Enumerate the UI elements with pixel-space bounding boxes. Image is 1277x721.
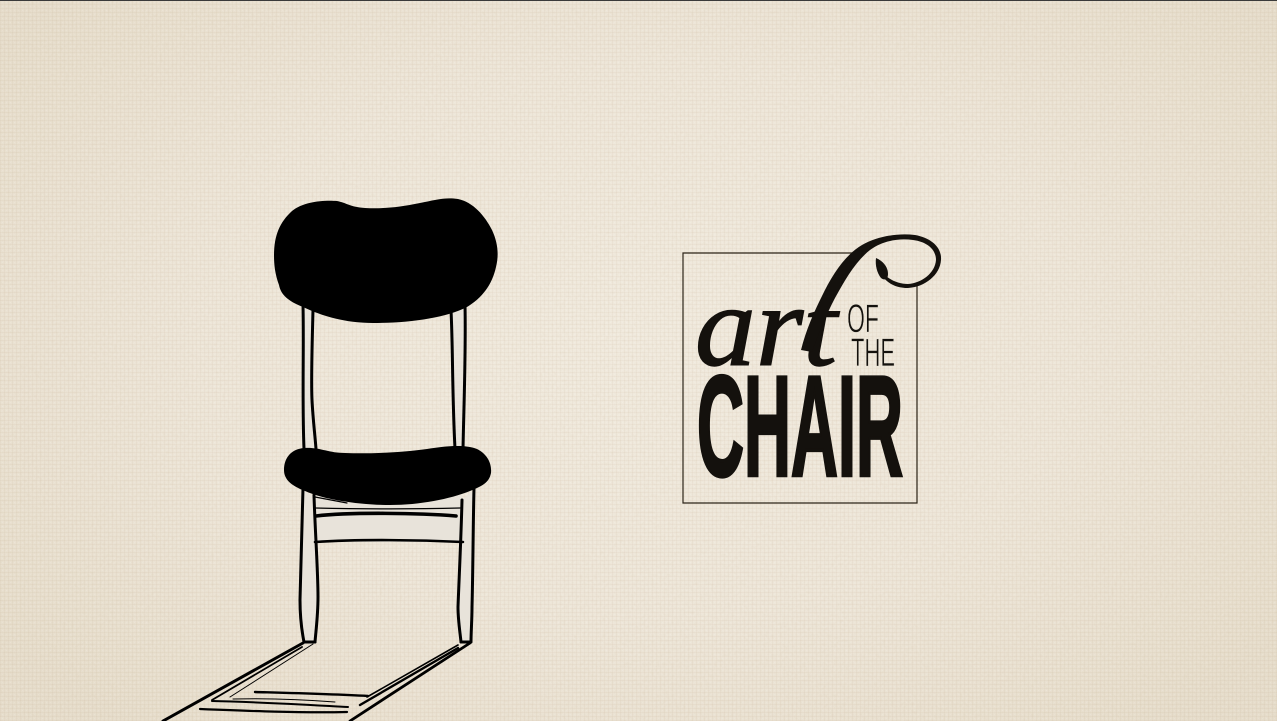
- logo: art of the chair: [683, 234, 941, 506]
- chair seat cushion: [284, 446, 491, 505]
- logo frame: [683, 253, 917, 503]
- logo word: the: THE: [851, 331, 895, 375]
- logo swash on the letter t: [801, 234, 941, 352]
- logo word: art: art: [695, 263, 840, 391]
- logo: art of the chair: CHAIR: [697, 348, 903, 506]
- chair cast shadow: [163, 643, 470, 721]
- logo word: of: OF: [847, 297, 879, 341]
- chair illustration: [163, 198, 498, 721]
- logo leaf tip: [876, 258, 888, 279]
- chair back cushion: [274, 198, 498, 323]
- chair legs and rails: [300, 488, 474, 642]
- chair back posts: [303, 305, 465, 449]
